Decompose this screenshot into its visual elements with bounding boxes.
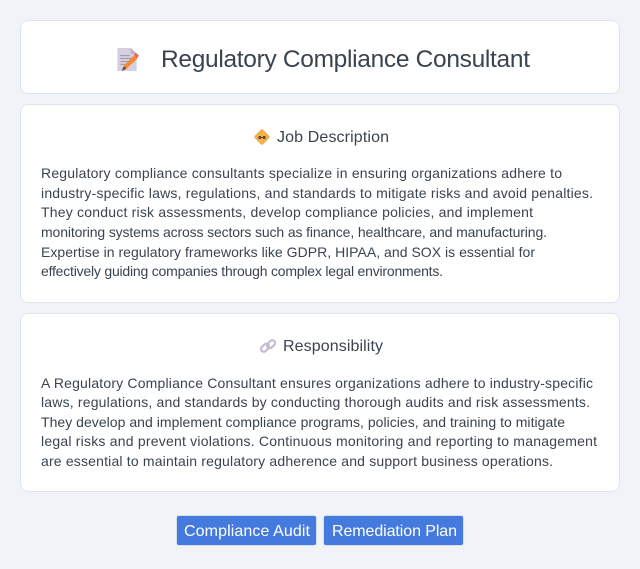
icon: diamond sign	[254, 129, 270, 145]
button: compliance audit: Compliance Audit	[184, 523, 311, 540]
panel: title card	[20, 20, 620, 94]
text block: responsibility: are essential to maintain regulatory adherence and support business operations.	[41, 453, 553, 469]
text block: job description: monitoring systems across sectors such as finance, healthcare, and manufacturing.	[41, 224, 547, 240]
text block: responsibility	[41, 375, 597, 469]
title: Regulatory Compliance Consultant	[161, 46, 530, 73]
text block: responsibility: legal risks and prevent violations. Continuous monitoring and reporting to management	[41, 433, 597, 449]
text block: responsibility: laws, regulations, and standards by conducting thorough audits and risk assessments.	[41, 394, 590, 410]
panel: job description	[20, 104, 620, 303]
text block: job description: effectively guiding companies through complex legal environments.	[41, 263, 443, 279]
heading: responsibility: Responsibility	[283, 338, 383, 355]
text block: job description: industry-specific laws, regulations, and standards to mitigate risks and avoid penalties.	[41, 185, 593, 201]
text block: job description: Expertise in regulatory frameworks like GDPR, HIPAA, and SOX is essential for	[41, 244, 535, 260]
text block: responsibility: A Regulatory Compliance Consultant ensures organizations adhere to industry-specific	[41, 375, 593, 391]
text block: job description: Regulatory compliance consultants specialize in ensuring organizations adhere to	[41, 165, 562, 181]
icon: document with pencil	[118, 48, 139, 71]
panel: responsibility	[20, 313, 620, 492]
button: remediation plan: Remediation Plan	[332, 523, 457, 540]
heading: job description: Job Description	[277, 129, 389, 146]
text block: job description: They conduct risk assessments, develop compliance policies, and implement	[41, 204, 533, 220]
button: compliance audit	[177, 516, 316, 545]
button: remediation plan	[324, 516, 463, 545]
icon: chain link	[260, 339, 276, 353]
text block: job description	[41, 165, 593, 279]
text block: responsibility: They develop and implement compliance programs, policies, and training to mitigate	[41, 414, 565, 430]
